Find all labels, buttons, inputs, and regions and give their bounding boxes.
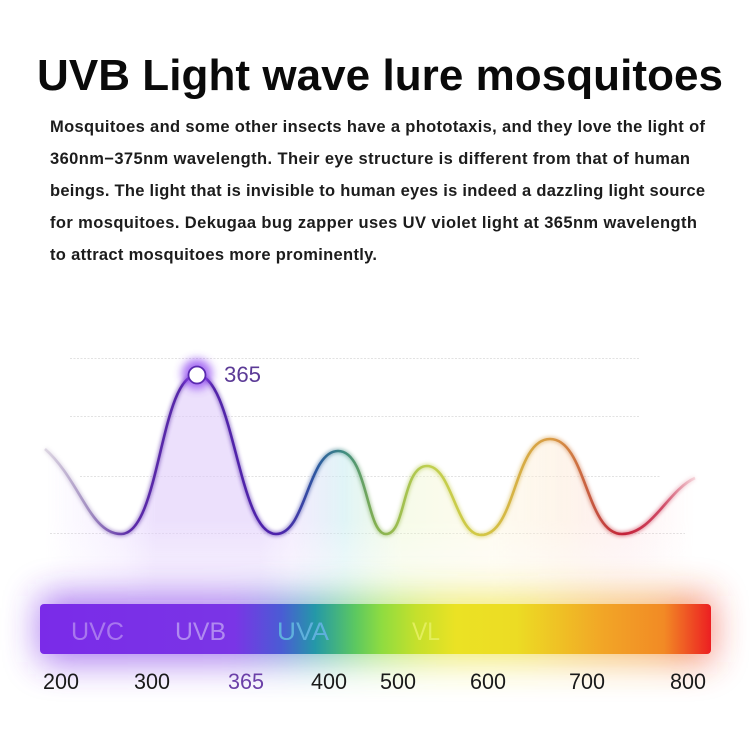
wavelength axis numbers <box>43 669 706 694</box>
wavelength axis numbers: 500 <box>380 669 416 694</box>
text block: description: beings. The light that is invisible to human eyes is indeed a dazzling light source <box>50 182 705 200</box>
text block: description: to attract mosquitoes more prominently. <box>50 246 377 264</box>
wavelength axis numbers: 400 <box>311 669 347 694</box>
text block: description: for mosquitoes. Dekugaa bug zapper uses UV violet light at 365nm wavelength <box>50 214 697 232</box>
wavelength axis numbers: 300 <box>134 669 170 694</box>
bar <box>40 604 711 654</box>
peak label: 365 <box>224 362 261 387</box>
wavelength axis numbers: 365 <box>228 669 264 694</box>
band labels: UVA <box>277 618 329 646</box>
wave curve glow <box>45 375 695 535</box>
area tint under the wave <box>82 380 656 594</box>
spectrum bar <box>40 596 711 662</box>
text block: description <box>50 118 706 264</box>
chart grid lines <box>50 358 685 534</box>
text block: description: 360nm−375nm wavelength. Their eye structure is different from that of human <box>50 150 690 168</box>
band labels <box>71 618 440 646</box>
wavelength axis numbers: 600 <box>470 669 506 694</box>
bar glow <box>40 596 711 662</box>
wavelength axis numbers: 200 <box>43 669 79 694</box>
title: UVB Light wave lure mosquitoes <box>37 51 723 100</box>
peak marker 365 <box>182 359 212 389</box>
wave chart <box>45 358 695 600</box>
text block: description: Mosquitoes and some other insects have a phototaxis, and they love the light of <box>50 118 706 136</box>
band labels: UVB <box>175 618 226 646</box>
wavelength axis numbers: 800 <box>670 669 706 694</box>
band labels: UVC <box>71 618 124 646</box>
band labels: VL <box>412 618 440 646</box>
wave curve <box>45 375 695 535</box>
wavelength axis numbers: 700 <box>569 669 605 694</box>
